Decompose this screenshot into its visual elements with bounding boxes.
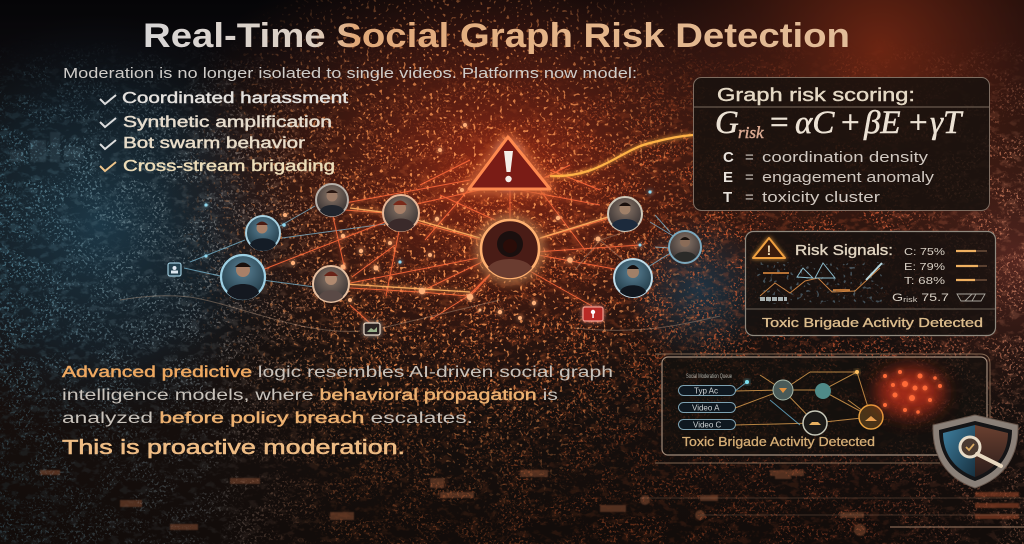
mini network — [735, 370, 883, 435]
dashboard alert label: Toxic Brigade Activity Detected — [682, 435, 875, 449]
mini line chart — [755, 262, 885, 304]
pill: Video C: Video C — [693, 420, 722, 430]
small icon: red alert tile — [583, 307, 603, 321]
signal: G risk: 75.7 — [917, 292, 949, 304]
legend: E — [723, 169, 935, 186]
warning triangle — [469, 137, 550, 189]
formula: βE — [863, 105, 901, 141]
icon: warning: ! — [767, 242, 771, 258]
item: bot swarm behavior — [100, 135, 305, 152]
portrait node 5 — [313, 266, 349, 302]
checklist — [100, 90, 349, 175]
legend: T: toxicity cluster — [762, 189, 880, 206]
signal: G risk — [892, 292, 985, 304]
closing statement: This is proactive moderation. — [62, 437, 405, 459]
item: coordinated harassment — [100, 90, 349, 107]
network junction dots — [283, 123, 600, 320]
central hub node — [481, 220, 539, 278]
red anomaly cluster — [876, 368, 944, 416]
portrait node 8 — [669, 231, 701, 263]
pill: Video A — [678, 402, 736, 412]
legend: T — [723, 189, 880, 206]
pill: Video A: Video A — [692, 404, 720, 412]
heading: graph risk scoring: Graph risk scoring: — [717, 85, 915, 105]
item: cross-stream brigading: Cross-stream brigading — [123, 158, 335, 175]
legend: T: T — [723, 189, 732, 206]
portrait node 7 — [614, 259, 652, 297]
formula: = — [770, 105, 789, 141]
panel: graph risk scoring — [694, 78, 990, 210]
legend: C — [723, 149, 929, 166]
portrait node 3 — [246, 216, 280, 251]
legend: E: = — [745, 169, 754, 186]
social network graph — [120, 123, 720, 335]
body paragraph: intelligence models, where behavioral propagation is — [62, 387, 558, 404]
body paragraph: Advanced predictive logic resembles AI-driven social graph — [62, 364, 613, 381]
title: Real-Time Social Graph Risk Detection — [143, 17, 850, 55]
signal: T — [904, 275, 987, 287]
small icon: user tile — [168, 263, 181, 276]
dashboard header text: Social Moderation Queue — [686, 374, 732, 380]
portrait node 1 — [316, 184, 348, 216]
icon: warning — [753, 238, 785, 258]
panel: risk signals — [746, 232, 996, 336]
item: cross-stream brigading — [100, 158, 335, 175]
signal: E: E: 79% — [904, 261, 945, 273]
glowing curve to scoring panel — [550, 135, 693, 176]
signal: C — [904, 246, 987, 258]
signal: G risk: risk — [903, 297, 918, 304]
item: coordinated harassment: Coordinated harassment — [122, 90, 349, 107]
formula: risk — [738, 123, 764, 142]
signal: T: T: 68% — [904, 275, 945, 287]
item: bot swarm behavior: Bot swarm behavior — [123, 135, 305, 152]
portrait node 4 — [221, 255, 265, 300]
icon: shield with magnifier — [933, 415, 1018, 488]
alert label: Toxic Brigade Activity Detected — [762, 315, 983, 330]
legend: C: coordination density — [762, 149, 929, 166]
heading: risk signals: Risk Signals: — [795, 243, 893, 259]
small icon: chat tile — [364, 323, 380, 335]
signal: G risk: G — [892, 292, 901, 304]
formula: αC — [795, 105, 835, 141]
signal: C: C: 75% — [904, 246, 945, 258]
network links — [120, 160, 720, 331]
link from triangle to central node — [508, 190, 510, 220]
formula: + — [909, 105, 928, 141]
portrait node 6 — [608, 197, 642, 231]
signal: E — [904, 261, 987, 273]
portrait node 2 — [383, 195, 419, 232]
body paragraph — [62, 364, 613, 427]
formula: G — [715, 105, 739, 141]
subtitle text: Moderation is no longer isolated to single videos. Platforms now model: — [63, 65, 637, 82]
panel: propagation dashboard — [655, 354, 990, 463]
formula: γT — [930, 105, 964, 141]
pill: Video C — [678, 420, 736, 430]
legend: T: = — [745, 189, 754, 206]
legend: E: engagement anomaly — [762, 169, 935, 186]
pill: Typ Ac: Typ Ac — [694, 386, 718, 396]
formula: + — [841, 105, 860, 141]
item: synthetic amplification — [100, 114, 332, 131]
pill: Typ Ac — [678, 386, 736, 396]
legend: C: C — [723, 149, 734, 166]
legend: E: E — [723, 169, 733, 186]
item: synthetic amplification: Synthetic amplification — [123, 114, 332, 131]
body paragraph: analyzed before policy breach escalates. — [62, 410, 473, 427]
legend: C: = — [745, 149, 754, 166]
